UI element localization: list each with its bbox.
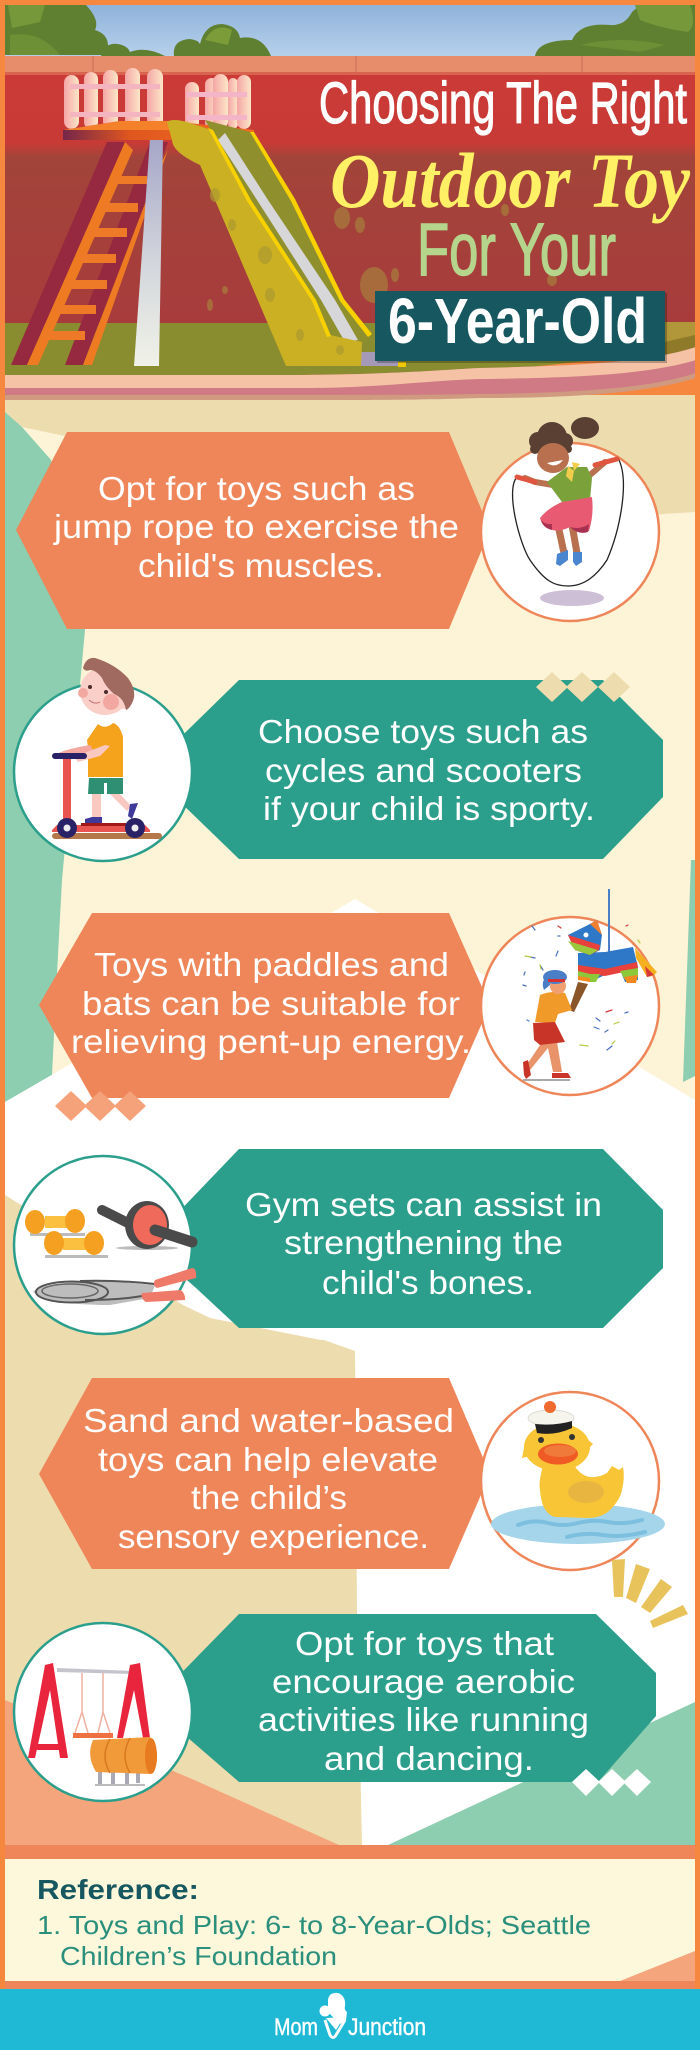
- panel: gym sets: [14, 1149, 663, 1334]
- slide chute: [218, 133, 358, 342]
- hexagon: [16, 432, 490, 629]
- skipping rope: [33, 1268, 196, 1305]
- text: Choose toys such as: [258, 713, 588, 750]
- dumbbells: [25, 1209, 108, 1258]
- title line 3: For Your: [417, 208, 616, 291]
- age badge: 6-Year-Old: [388, 285, 647, 357]
- logo text: [274, 2014, 426, 2041]
- ab roller: [102, 1201, 192, 1250]
- stick: [569, 982, 588, 1012]
- circle: [481, 1392, 659, 1570]
- diamonds: [572, 1769, 651, 1796]
- slide front: [167, 120, 362, 366]
- diamonds: [536, 672, 630, 702]
- text: Sand and water-based: [83, 1402, 454, 1439]
- reference heading: Reference:: [37, 1874, 199, 1905]
- text: [245, 1186, 602, 1301]
- text: if your child is sporty.: [263, 790, 595, 827]
- text: Opt for toys that: [295, 1625, 554, 1662]
- orange divider: [0, 1981, 700, 1989]
- icon: boy on scooter: [52, 658, 162, 839]
- text: child's muscles.: [138, 547, 384, 584]
- icon: child hitting pinata: [523, 889, 657, 1081]
- reference text: 1. Toys and Play: 6- to 8-Year-Olds; Seattle: [37, 1910, 591, 1940]
- text: and dancing.: [324, 1740, 534, 1777]
- pinata: [578, 947, 638, 982]
- slide back: [205, 120, 372, 345]
- text: Gym sets can assist in: [245, 1186, 602, 1223]
- circle: [14, 683, 192, 861]
- reference text: [37, 1910, 591, 1971]
- text: [258, 713, 595, 827]
- text: Toys with paddles and: [94, 946, 449, 983]
- hero scene: [5, 5, 696, 400]
- text: child's bones.: [322, 1264, 534, 1301]
- panel: paddles and bats: [39, 889, 659, 1121]
- hexagon: [150, 1614, 656, 1782]
- hexagon: [147, 1149, 663, 1328]
- circle: [481, 443, 659, 621]
- text: [53, 470, 459, 584]
- panel: scooter: [14, 658, 663, 861]
- fence left: [64, 68, 163, 129]
- wall stains: [207, 204, 557, 311]
- text: bats can be suitable for: [82, 985, 460, 1022]
- wall: [5, 75, 695, 325]
- title: [319, 71, 690, 363]
- text: [83, 1402, 454, 1555]
- panel: sand and water toys: [39, 1378, 688, 1628]
- hexagon: [39, 913, 490, 1098]
- text: jump rope to exercise the: [53, 508, 459, 545]
- logo text: Mom: [274, 2014, 318, 2041]
- circle: [14, 1623, 192, 1801]
- icon: swing and tunnel: [28, 1663, 157, 1786]
- logo text: Junction: [348, 2014, 426, 2041]
- child: [526, 1042, 562, 1072]
- footer: [0, 1989, 700, 2050]
- text: toys can help elevate: [98, 1441, 438, 1478]
- icon: gym equipment: [25, 1201, 196, 1305]
- section background: [5, 395, 696, 1845]
- fence right: [185, 74, 251, 129]
- text: [258, 1625, 589, 1777]
- circle: [481, 917, 659, 1095]
- panel: aerobic toys: [14, 1614, 656, 1801]
- icon: rubber duck: [491, 1401, 665, 1544]
- icon: mother and child: [320, 1993, 347, 2038]
- text: [71, 946, 471, 1060]
- text: relieving pent-up energy.: [71, 1023, 471, 1060]
- sky: [5, 5, 695, 60]
- pole: [134, 138, 163, 366]
- pavement: [5, 347, 696, 400]
- reference text: Children’s Foundation: [60, 1941, 337, 1971]
- hexagon: [147, 680, 663, 859]
- text: strengthening the: [284, 1224, 563, 1261]
- platform: [63, 121, 254, 140]
- circle: [14, 1156, 192, 1334]
- text: cycles and scooters: [265, 752, 582, 789]
- bushes: [5, 5, 695, 56]
- panel: jump rope: [16, 417, 659, 629]
- yellow burst marks: [612, 1559, 688, 1628]
- icon: girl with jump rope: [513, 417, 623, 606]
- text: the child’s: [191, 1479, 347, 1516]
- slide foot: [360, 352, 398, 366]
- grass: [5, 323, 695, 380]
- text: activities like running: [258, 1701, 589, 1738]
- hexagon: [39, 1378, 490, 1569]
- panel: reference: [5, 1859, 695, 1981]
- text: Opt for toys such as: [98, 470, 415, 507]
- text: encourage aerobic: [272, 1663, 575, 1700]
- ladder rails: [11, 142, 125, 365]
- playground slide: [11, 68, 406, 367]
- orange divider: [0, 1845, 700, 1859]
- ladder rungs: [45, 176, 147, 340]
- diamonds: [55, 1091, 146, 1121]
- confetti: [523, 925, 640, 1050]
- text: sensory experience.: [118, 1518, 429, 1555]
